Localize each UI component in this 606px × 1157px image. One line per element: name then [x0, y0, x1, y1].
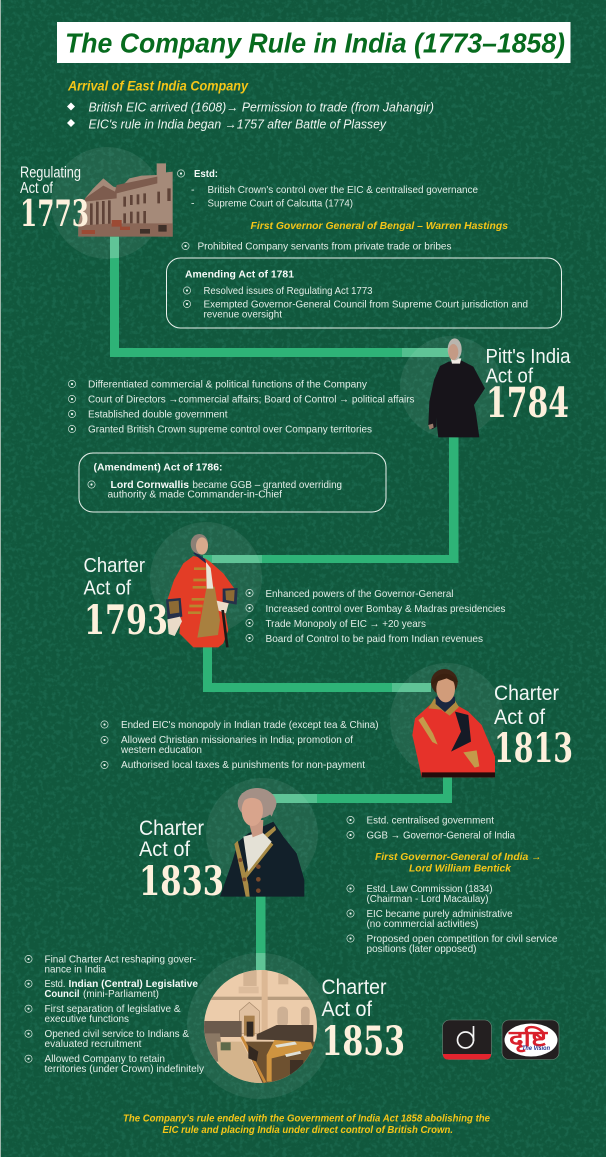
heading: Charter Act of: Act of: [322, 998, 372, 1021]
1853 details: Council: [44, 988, 80, 1000]
halo circles: [51, 147, 504, 1099]
year: 1773: 1773: [20, 193, 89, 235]
1833 details: (no commercial activities): [366, 918, 478, 930]
year: 1813: 1813: [494, 725, 573, 772]
closing note: The Company's rule ended with the Government of India Act 1858 abolishing the: [123, 1112, 490, 1124]
year: 1793: 1793: [84, 597, 168, 644]
heading: Charter Act of: [84, 555, 145, 600]
1853 details: [25, 954, 205, 1075]
1793 details: Trade Monopoly of EIC → +20 years: [266, 618, 426, 630]
callout: Amending Act of 1781: [166, 258, 562, 328]
1833 details: Estd. Law Commission (1834): [366, 883, 492, 895]
1793 details: Increased control over Bombay & Madras presidencies: [266, 603, 506, 615]
1833 details: First Governor-General of India →: [375, 851, 542, 863]
logo: d icon: [442, 1020, 492, 1060]
image: legislative council chamber: [204, 970, 317, 1083]
1813 details: [101, 719, 379, 771]
section: Charter Act of 1833: [139, 788, 558, 955]
1833 details: [347, 814, 558, 955]
1853 details: Allowed Company to retain: [44, 1053, 165, 1065]
section: Charter Act of 1813: [101, 669, 573, 777]
year: 1853: 1853: [322, 1018, 405, 1065]
1773 details: Prohibited Company servants from private trade or bribes: [198, 240, 452, 252]
1813 details: Allowed Christian missionaries in India; promotion of: [121, 734, 353, 746]
callout: Amendment Act of 1786: authority & made Commander-in-Chief: [108, 488, 282, 500]
1773 details: -: [191, 198, 195, 210]
heading: Charter Act of: Act of: [84, 578, 131, 600]
closing note: EIC rule and placing India under direct control of British Crown.: [162, 1124, 453, 1136]
heading: Charter Act of: [494, 682, 559, 729]
1853 details: (mini-Parliament): [83, 988, 159, 1000]
portrait: William Pitt: [428, 338, 485, 437]
section: Charter Act of 1853: [25, 954, 405, 1087]
section: Charter Act of 1793: [84, 534, 506, 647]
callout: Amending Act of 1781: Exempted Governor-General Council from Supreme Court jurisdiction and: [204, 298, 528, 310]
1784 details: Granted British Crown supreme control over Company territories: [88, 424, 372, 436]
intro bullet 2: EIC's rule in India began →1757 after Battle of Plassey: [88, 118, 387, 132]
year: 1833: 1833: [139, 858, 224, 905]
1773 details: British Crown's control over the EIC & centralised governance: [208, 184, 478, 196]
logo: Drishti The Vision: The Vision: [522, 1045, 550, 1052]
1784 details: Court of Directors →commercial affairs; Board of Control → political affairs: [88, 394, 414, 406]
callout: Amendment Act of 1786: Lord Cornwallis: [110, 479, 189, 491]
intro heading: Arrival of East India Company: [67, 78, 249, 94]
1833 details: Proposed open competition for civil service: [366, 933, 558, 945]
1833 details: (Chairman - Lord Macaulay): [366, 893, 488, 905]
1853 details: Indian (Central) Legislative: [68, 978, 198, 990]
1773 details: First Governor General of Bengal – Warren Hastings: [250, 220, 508, 232]
heading: Charter Act of: [322, 976, 386, 1021]
portrait: naval officer: [220, 788, 304, 897]
1773 details: -: [191, 184, 195, 196]
1773 details: [177, 168, 508, 252]
1813 details: Authorised local taxes & punishments for non-payment: [121, 759, 365, 771]
1833 details: GGB → Governor-General of India: [366, 830, 515, 842]
portrait: Duke of Wellington: [412, 669, 495, 777]
callout: Amendment Act of 1786: became GGB – granted overriding: [192, 479, 342, 491]
callout: Amending Act of 1781: Amending Act of 1781: [185, 268, 294, 280]
1813 details: Ended EIC's monopoly in Indian trade (except tea & China): [121, 719, 378, 731]
heading: Charter Act of: Act of: [494, 706, 545, 729]
1853 details: First separation of legislative &: [44, 1003, 180, 1015]
1793 details: [246, 588, 506, 645]
heading: Charter Act of: Act of: [139, 838, 190, 861]
intro bullet 1: British EIC arrived (1608)→ Permission to trade (from Jahangir): [88, 100, 434, 114]
heading: Charter Act of: Charter: [139, 817, 204, 840]
heading: Regulating Act of: Act of: [20, 180, 54, 197]
intro: arrival of East India Company: [67, 78, 434, 132]
1833 details: Lord William Bentick: [409, 862, 512, 874]
1784 details: Established double government: [88, 408, 228, 420]
1793 details: Board of Control to be paid from Indian revenues: [266, 633, 483, 645]
heading: Pitt's India Act of: Pitt's India: [486, 346, 571, 368]
1784 details: Differentiated commercial & political functions of the Company: [88, 378, 368, 390]
1833 details: EIC became purely administrative: [366, 908, 513, 920]
callout: Amendment Act of 1786: [79, 453, 386, 512]
1833 details: positions (later opposed): [366, 943, 476, 955]
heading: Regulating Act of: Regulating: [20, 164, 81, 182]
1853 details: nance in India: [44, 964, 106, 976]
1813 details: western education: [120, 744, 202, 756]
1853 details: executive functions: [44, 1013, 129, 1025]
callout: Amending Act of 1781: Resolved issues of Regulating Act 1773: [204, 285, 373, 297]
year: 1784: 1784: [486, 379, 569, 427]
1853 details: evaluated recruitment: [44, 1038, 142, 1050]
callout: Amending Act of 1781: revenue oversight: [204, 308, 282, 320]
heading: Regulating Act of: [20, 164, 81, 197]
section: Pitt's India Act of 1784: [68, 338, 571, 512]
logo: Drishti The Vision: दृष्टि: [508, 1025, 548, 1053]
1784 details: [68, 378, 415, 436]
1853 details: territories (under Crown) indefinitely: [44, 1063, 205, 1075]
timeline connector: [110, 230, 458, 975]
heading: Charter Act of: Charter: [84, 555, 145, 577]
heading: Pitt's India Act of: Act of: [486, 366, 533, 388]
heading: Charter Act of: [139, 817, 204, 861]
1833 details: Estd. centralised government: [366, 814, 494, 826]
logo: Drishti The Vision: [502, 1020, 559, 1060]
heading: Charter Act of: Charter: [494, 682, 559, 705]
heading: Pitt's India Act of: [486, 346, 571, 388]
1773 details: Estd:: [194, 168, 218, 180]
title: The Company Rule in India (1773–1858): [65, 28, 565, 58]
callout: Amendment Act of 1786: (Amendment) Act of 1786:: [94, 462, 222, 474]
image: East India House building: [78, 163, 173, 237]
1853 details: Final Charter Act reshaping gover-: [44, 954, 196, 966]
heading: Charter Act of: Charter: [322, 976, 386, 999]
closing note: [123, 1112, 490, 1136]
section: Regulating Act of 1773: [20, 163, 562, 328]
1793 details: Enhanced powers of the Governor-General: [266, 588, 454, 600]
portrait: officer in red coat: [166, 534, 238, 647]
1853 details: Opened civil service to Indians &: [44, 1028, 189, 1040]
1853 details: Estd.: [44, 978, 66, 990]
1773 details: Supreme Court of Calcutta (1774): [208, 198, 353, 210]
